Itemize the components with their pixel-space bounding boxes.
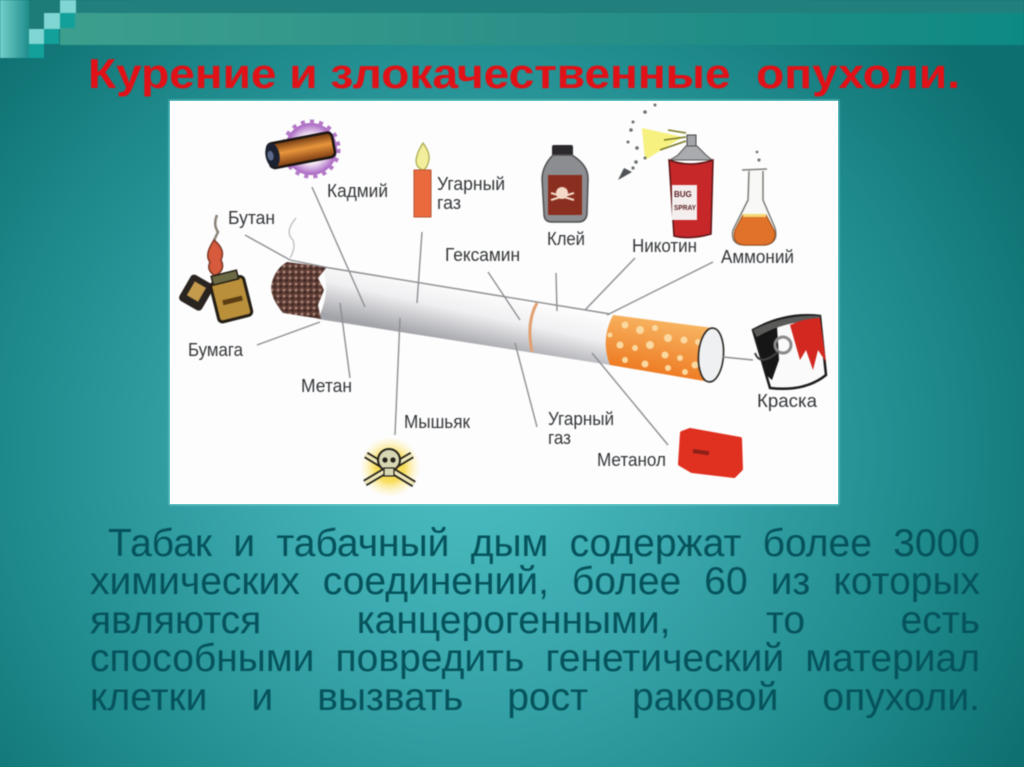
icon: paint can <box>753 315 826 389</box>
labels: Клей <box>547 229 585 249</box>
labels: Метан <box>301 376 352 396</box>
labels <box>188 174 818 470</box>
labels: Метанол <box>597 450 666 470</box>
labels: Кадмий <box>327 181 388 201</box>
tobacco ash end <box>271 262 327 319</box>
labels: Гексамин <box>445 245 520 265</box>
labels: газ <box>437 193 461 213</box>
icon: flask <box>732 151 776 245</box>
band ring <box>530 303 537 352</box>
labels: Краска <box>757 391 818 411</box>
icon: red fuel can <box>680 430 741 476</box>
body text <box>90 522 980 719</box>
labels: Бумага <box>188 340 244 360</box>
leader lines <box>245 187 753 445</box>
icon: skull and crossbones <box>361 438 419 496</box>
labels: Аммоний <box>721 247 794 267</box>
body text: Табак и табачный дым содержат более 3000 <box>108 522 980 565</box>
icon: candle <box>414 143 431 217</box>
labels: Угарный <box>548 409 614 429</box>
body text: способными повредить генетический материал <box>90 637 980 680</box>
icon: spray can: SPRAY <box>674 205 696 212</box>
cigarette <box>271 218 725 383</box>
icon: glue bottle <box>542 145 588 222</box>
filter <box>606 315 725 383</box>
icon: spray can: BUG <box>674 190 692 199</box>
icon: spray can <box>618 104 713 238</box>
cigarette paper <box>318 266 613 365</box>
labels: Никотин <box>632 236 697 256</box>
header decoration: band and squares <box>0 0 1024 58</box>
labels: Бутан <box>228 208 275 228</box>
title: Курение и злокачественные опухоли. <box>88 50 960 97</box>
icon: cadmium battery <box>263 122 338 176</box>
labels: Мышьяк <box>404 412 470 432</box>
labels: газ <box>548 428 571 448</box>
body text: клетки и вызвать рост раковой опухоли. <box>90 676 980 719</box>
labels: Угарный <box>437 174 505 194</box>
body text: химических соединений, более 60 из которых <box>90 560 980 603</box>
icon: lighters with flame <box>178 215 253 323</box>
body text: являются канцерогенными, то есть <box>90 599 980 642</box>
smoke <box>289 218 296 258</box>
panel: cigarette diagram <box>170 101 838 504</box>
